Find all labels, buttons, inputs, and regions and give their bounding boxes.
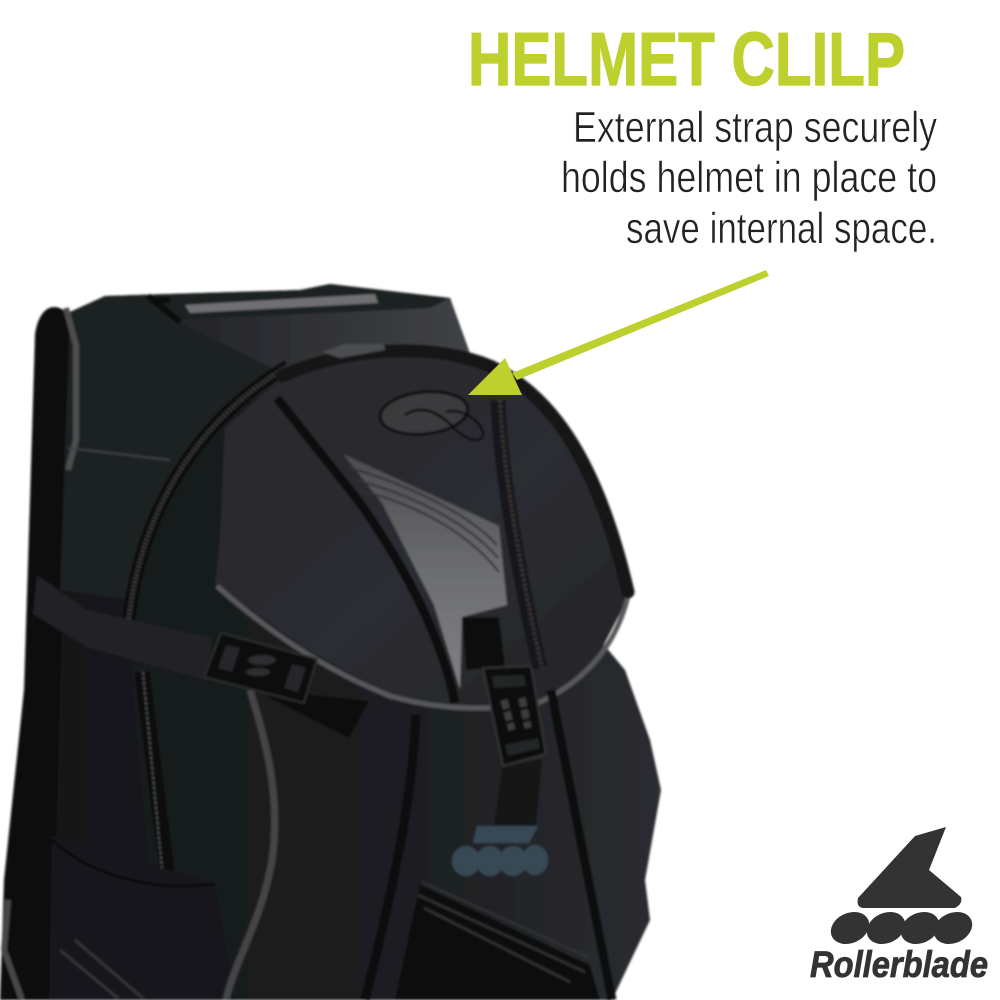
description text — [561, 103, 937, 253]
bag logo — [452, 826, 548, 876]
logo: wheels — [826, 906, 977, 950]
side mesh pocket — [45, 835, 235, 1000]
side panel between zipper and flap — [128, 368, 282, 880]
back shoulder strap — [0, 307, 78, 1000]
lower webbing — [494, 759, 542, 826]
grey strap edge — [46, 660, 52, 1000]
arrow — [468, 270, 769, 395]
side strap — [33, 575, 212, 680]
left cord — [226, 690, 275, 1000]
top zipper pocket — [185, 294, 378, 313]
top small buckle — [322, 344, 385, 358]
velcro tab — [462, 617, 505, 670]
main zipper — [126, 366, 288, 640]
flap — [215, 351, 629, 712]
lower zipper — [142, 672, 168, 880]
lower body seams — [365, 715, 416, 1000]
rollerblade logo — [810, 827, 988, 985]
flap binding — [217, 586, 628, 708]
backpack photo — [0, 284, 661, 1000]
main body — [52, 284, 661, 1000]
glossy lower panel — [395, 882, 600, 1000]
upper rear panel — [60, 284, 473, 600]
grey wedge — [343, 454, 507, 689]
front buckle — [483, 666, 546, 766]
side buckle — [204, 633, 317, 703]
title: HELMET CLILP — [468, 17, 905, 101]
flap seams — [277, 398, 455, 703]
helmet clip — [378, 388, 483, 440]
logo: skate boot — [858, 827, 961, 908]
buckle tab — [260, 689, 369, 738]
